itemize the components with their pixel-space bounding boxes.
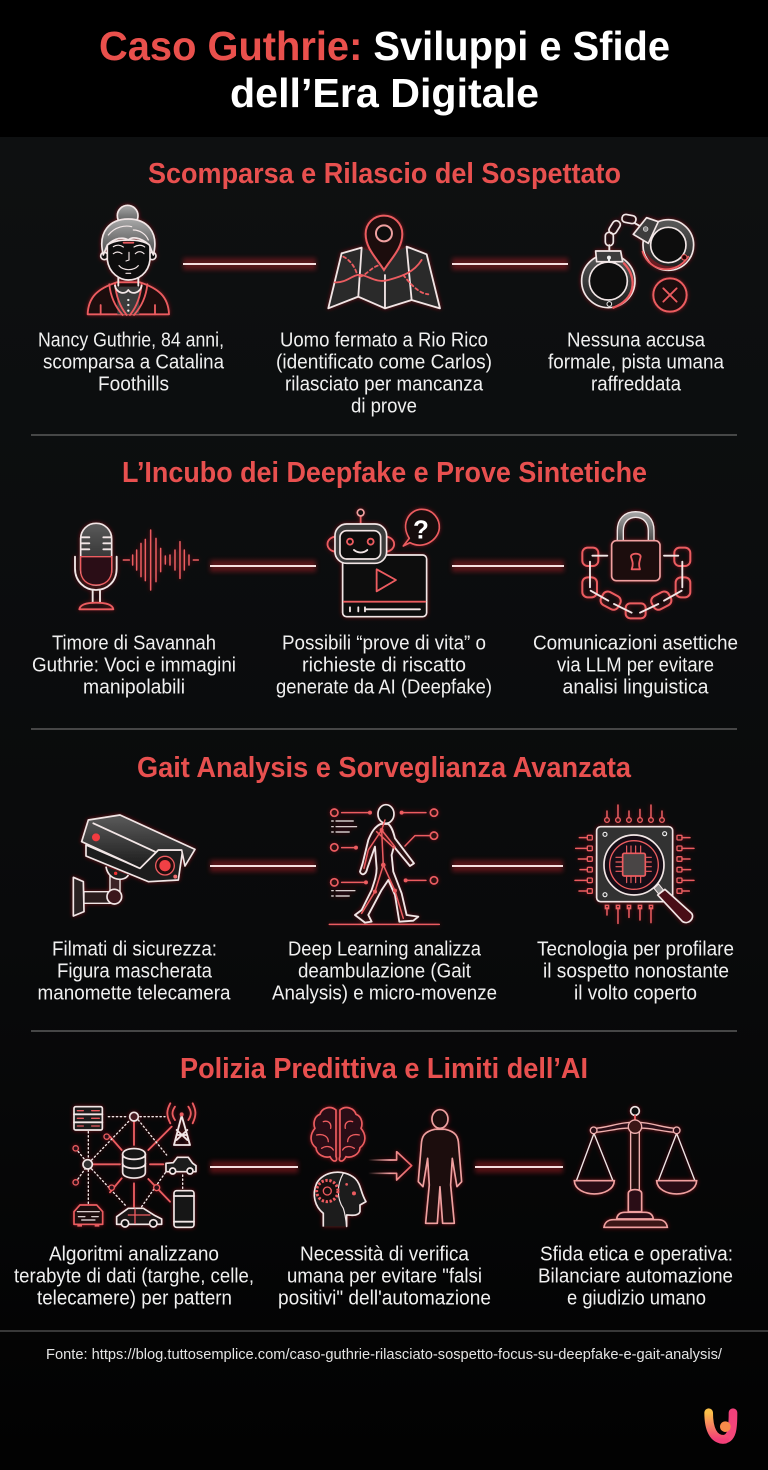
title (99, 23, 670, 116)
icon: microphone with waveform (75, 523, 198, 609)
panel: gait analysis (38, 752, 734, 1004)
connector (452, 258, 568, 270)
icon: robot and video: ? (413, 514, 429, 544)
icon: scales of justice (574, 1107, 697, 1227)
connector (452, 560, 564, 572)
text: uomo fermato: di prove (351, 396, 417, 418)
icon: data network (73, 1103, 196, 1227)
icon: elderly woman (88, 205, 169, 315)
text: uomo fermato: rilasciato per mancanza (285, 374, 484, 396)
icon: brain and AI head leading to person (311, 1108, 462, 1227)
text: verifica umana: positivi" dell'automazione (278, 1288, 491, 1310)
text: algoritmi: terabyte di dati (targhe, celle, (14, 1266, 254, 1288)
text: algoritmi: Algoritmi analizzano (49, 1244, 219, 1266)
connector (452, 860, 563, 872)
text: prove di vita: richieste di riscatto (302, 654, 466, 676)
text: algoritmi (14, 1244, 254, 1310)
text: deep learning: Analysis) e micro-movenze (272, 982, 497, 1004)
text: verifica umana: Necessità di verifica (300, 1244, 470, 1266)
text: Nancy Guthrie: Nancy Guthrie, 84 anni, (38, 330, 224, 352)
icon: chip under magnifier (575, 805, 694, 923)
text: Nancy Guthrie: Foothills (98, 374, 169, 396)
text: tecnologia: il sospetto nonostante (543, 960, 729, 982)
text: filmati: Filmati di sicurezza: (52, 938, 217, 960)
text: filmati: manomette telecamera (38, 982, 231, 1004)
icon: walking figure with gait markers (329, 805, 439, 924)
text: nessuna accusa: raffreddata (591, 374, 682, 396)
icon: map with pin (328, 216, 440, 308)
text: deep learning (272, 938, 497, 1004)
heading: polizia predittiva: Polizia Predittiva e Limiti dell’AI (180, 1053, 588, 1085)
text: timore: Guthrie: Voci e immagini (32, 654, 236, 676)
connector (210, 1161, 298, 1173)
text: comunicazioni (533, 632, 738, 698)
text: filmati (38, 938, 231, 1004)
text: prove di vita: generate da AI (Deepfake) (276, 676, 492, 698)
text: deep learning: deambulazione (Gait (298, 960, 471, 982)
text: algoritmi: telecamere) per pattern (37, 1288, 232, 1310)
connector (210, 560, 316, 572)
text: filmati: Figura mascherata (57, 960, 213, 982)
connector (475, 1161, 563, 1173)
text: Nancy Guthrie: scomparsa a Catalina (43, 352, 225, 374)
text: comunicazioni: via LLM per evitare (557, 654, 714, 676)
text: nessuna accusa: Nessuna accusa (567, 330, 706, 352)
source line: Fonte: https://blog.tuttosemplice.com/caso-guthrie-rilasciato-sospetto-focus-su-deepfake-e-gait-analysis/ (46, 1346, 723, 1363)
icon: handcuffs (582, 214, 694, 312)
text: verifica umana (278, 1244, 491, 1310)
text: prove di vita: Possibili “prove di vita” o (282, 632, 486, 654)
panel: deepfake (32, 457, 738, 698)
text: uomo fermato (276, 330, 492, 418)
text: nessuna accusa: formale, pista umana (548, 352, 725, 374)
heading: gait analysis: Gait Analysis e Sorveglianza Avanzata (137, 752, 632, 784)
text: sfida etica: e giudizio umano (567, 1288, 706, 1310)
text: tecnologia (537, 938, 734, 1004)
heading: deepfake: L’Incubo dei Deepfake e Prove Sintetiche (122, 457, 647, 489)
text: timore (32, 632, 236, 698)
text: verifica umana: umana per evitare "falsi (287, 1266, 482, 1288)
text: prove di vita (276, 632, 492, 698)
connector (210, 860, 316, 872)
text: timore: manipolabili (83, 676, 185, 698)
text: deep learning: Deep Learning analizza (288, 938, 482, 960)
text: sfida etica (538, 1244, 733, 1310)
icon: padlock with chain (582, 512, 690, 618)
header band (0, 0, 768, 137)
icon: security camera (73, 815, 195, 916)
text: Nancy Guthrie (38, 330, 225, 396)
text: uomo fermato: (identificato come Carlos) (276, 352, 492, 374)
title: dell’Era Digitale (230, 70, 539, 116)
text: sfida etica: Bilanciare automazione (538, 1266, 733, 1288)
logo (709, 1413, 733, 1439)
text: nessuna accusa (548, 330, 725, 396)
text: comunicazioni: analisi linguistica (562, 676, 709, 698)
text: sfida etica: Sfida etica e operativa: (540, 1244, 733, 1266)
text: timore: Timore di Savannah (52, 632, 216, 654)
connector (183, 258, 316, 270)
icon: robot and video (327, 509, 439, 617)
panel: polizia predittiva (14, 1053, 733, 1310)
text: uomo fermato: Uomo fermato a Rio Rico (280, 330, 488, 352)
text: tecnologia: Tecnologia per profilare (537, 938, 734, 960)
text: tecnologia: il volto coperto (574, 982, 697, 1004)
heading: scomparsa: Scomparsa e Rilascio del Sospettato (148, 158, 621, 190)
panel: scomparsa (38, 158, 725, 418)
title: Caso Guthrie: Sviluppi e Sfide (99, 23, 670, 69)
text: comunicazioni: Comunicazioni asettiche (533, 632, 738, 654)
